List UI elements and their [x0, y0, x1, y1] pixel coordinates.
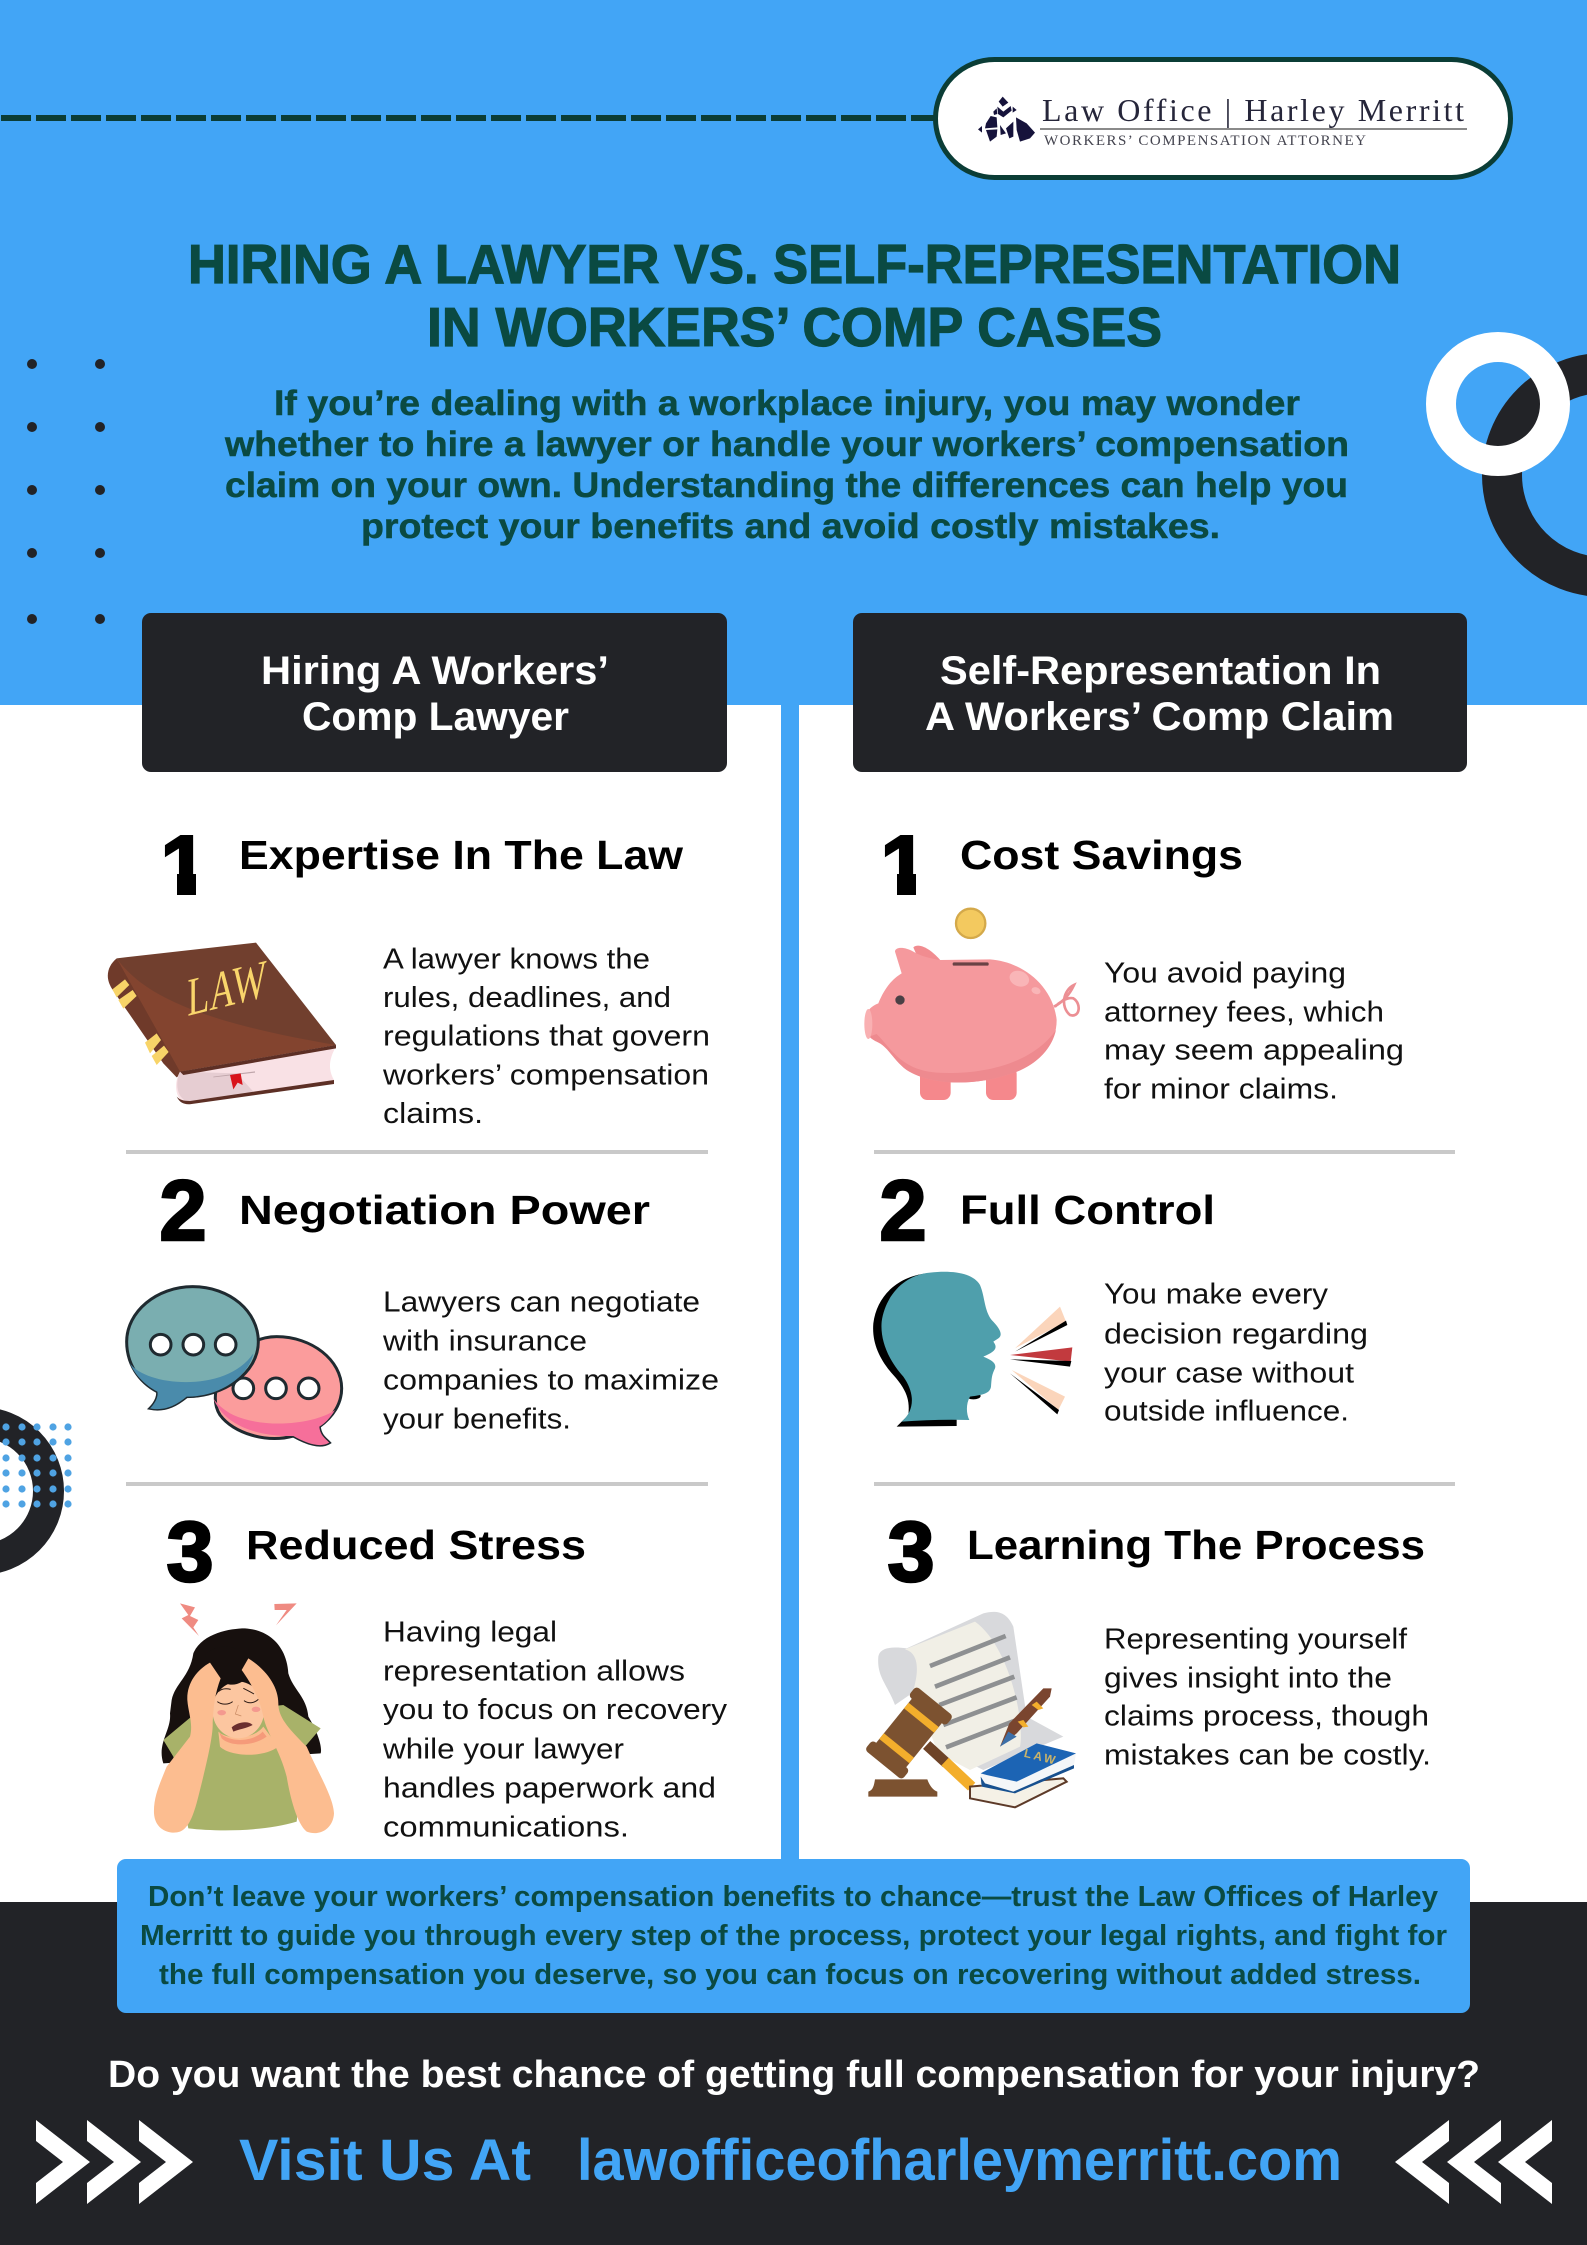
icon: law office logo mark: [978, 97, 1035, 142]
body text: workers’ compensation: [382, 1060, 709, 1092]
call to action: website: Visit Us At: [239, 2128, 531, 2193]
item: reduced stress: [154, 1505, 728, 1844]
icon: law book: LAW: [187, 947, 267, 1028]
column heading: hiring a lawyer: Comp Lawyer: [302, 695, 569, 739]
body text: with insurance: [382, 1326, 587, 1358]
body text: claims process, though: [1104, 1700, 1429, 1732]
item: full control: [873, 1164, 1368, 1428]
body text: [1104, 1278, 1368, 1428]
icon: stressed woman: [154, 1603, 334, 1833]
question: Do you want the best chance of getting full compensation for your injury?: [108, 2054, 1480, 2096]
item: full control: Full Control: [960, 1187, 1215, 1233]
item: negotiation power: Negotiation Power: [239, 1187, 650, 1233]
call to action: website: [239, 2128, 1342, 2193]
icon: speaking head: [873, 1272, 1072, 1427]
call to action: website: lawofficeofharleymerritt.com: [577, 2128, 1342, 2193]
body text: your benefits.: [383, 1404, 571, 1436]
logo name: Law Office | Harley Merritt: [1042, 92, 1464, 128]
logo tagline: WORKERS’ COMPENSATION ATTORNEY: [1044, 133, 1366, 149]
body text: Having legal: [383, 1616, 557, 1648]
item: learning the process: Learning The Process: [967, 1522, 1425, 1568]
column heading: self-representation: Self-Representation In: [940, 649, 1381, 693]
body text: outside influence.: [1104, 1396, 1349, 1428]
item: reduced stress: 3: [166, 1505, 214, 1600]
item: cost savings: Cost Savings: [960, 832, 1243, 878]
body text: gives insight into the: [1104, 1662, 1392, 1694]
icon: gavel, scroll and books: LAW: [1023, 1746, 1057, 1767]
body text: regulations that govern: [383, 1020, 710, 1052]
body text: mistakes can be costly.: [1104, 1740, 1431, 1772]
intro text: claim on your own. Understanding the differences can help you: [225, 466, 1348, 505]
panel: hiring a lawyer: [0, 613, 781, 1905]
body text: representation allows: [383, 1656, 685, 1688]
column heading: hiring a lawyer: Hiring A Workers’: [261, 649, 609, 693]
item: reduced stress: Reduced Stress: [246, 1522, 586, 1568]
item: negotiation power: [127, 1164, 719, 1445]
callout: the full compensation you deserve, so you can focus on recovering without added stress.: [159, 1959, 1421, 1991]
body text: may seem appealing: [1104, 1034, 1404, 1066]
title: [188, 233, 1401, 358]
body text: while your lawyer: [382, 1734, 624, 1766]
arrows: right chevrons: [1395, 2120, 1552, 2204]
body text: handles paperwork and: [383, 1772, 716, 1804]
item: expertise in the law: 1: [160, 819, 208, 914]
dashed line to logo: [1, 115, 935, 121]
body text: A lawyer knows the: [383, 944, 650, 976]
item: cost savings: [864, 819, 1404, 1106]
body text: You make every: [1104, 1278, 1329, 1310]
column heading: self-representation: [853, 613, 1467, 772]
item: full control: 2: [879, 1164, 927, 1259]
intro text: protect your benefits and avoid costly mistakes.: [361, 507, 1220, 546]
title: IN WORKERS’ COMP CASES: [427, 296, 1162, 358]
icon: law book: [108, 943, 336, 1104]
item: learning the process: 3: [887, 1505, 935, 1600]
body text: claims.: [383, 1098, 483, 1130]
decorative ring and dots: left edge: [0, 1422, 72, 1560]
body text: for minor claims.: [1104, 1074, 1338, 1106]
body text: companies to maximize: [383, 1364, 719, 1396]
title: HIRING A LAWYER VS. SELF-REPRESENTATION: [188, 233, 1401, 295]
callout: [117, 1859, 1470, 2013]
body text: your case without: [1104, 1358, 1354, 1390]
body text: [382, 1616, 728, 1844]
item: expertise in the law: Expertise In The Law: [239, 832, 683, 878]
column heading: hiring a lawyer: [142, 613, 727, 772]
body text: Representing yourself: [1104, 1624, 1408, 1656]
callout: Merritt to guide you through every step of the process, protect your legal rights, and fight for: [140, 1920, 1447, 1952]
item: negotiation power: 2: [159, 1164, 207, 1259]
body text: [382, 944, 710, 1130]
icon: speech bubbles: [127, 1287, 342, 1445]
decorative dots: left of header: [27, 359, 105, 624]
body text: you to focus on recovery: [383, 1694, 728, 1726]
body text: decision regarding: [1104, 1318, 1368, 1350]
intro text: If you’re dealing with a workplace injury, you may wonder: [274, 384, 1300, 423]
column heading: self-representation: A Workers’ Comp Claim: [925, 695, 1394, 739]
body text: [382, 1286, 719, 1436]
logo badge: [936, 60, 1510, 178]
intro text: whether to hire a lawyer or handle your workers’ compensation: [224, 425, 1349, 464]
body text: You avoid paying: [1104, 958, 1346, 990]
icon: gavel, scroll and books: [865, 1612, 1076, 1807]
icon: piggy bank: [864, 909, 1079, 1100]
item: expertise in the law: [108, 819, 710, 1130]
decorative rings: top right: [1441, 347, 1587, 577]
footer background: [0, 1902, 1587, 2245]
body text: attorney fees, which: [1104, 996, 1384, 1028]
callout: Don’t leave your workers’ compensation benefits to chance—trust the Law Offices of Harley: [148, 1881, 1438, 1913]
body text: Lawyers can negotiate: [383, 1286, 700, 1318]
intro text: [224, 384, 1349, 546]
body text: rules, deadlines, and: [383, 982, 671, 1014]
item: cost savings: 1: [880, 819, 928, 914]
panel: self-representation: [799, 613, 1587, 1905]
arrows: left chevrons: [36, 2120, 193, 2204]
body text: [1104, 958, 1404, 1106]
body text: [1104, 1624, 1431, 1772]
item: learning the process: [865, 1505, 1431, 1807]
body text: communications.: [383, 1812, 629, 1844]
